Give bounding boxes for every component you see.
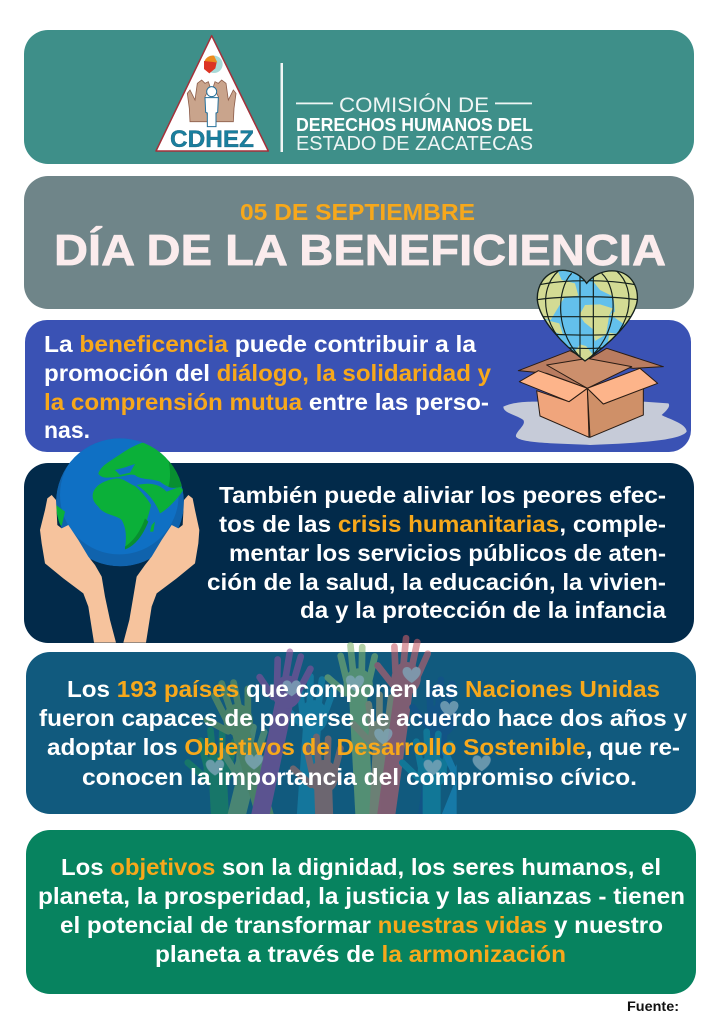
text block: objetivos <box>38 854 685 967</box>
palm hearts <box>206 667 491 776</box>
text block: dialogue: nas. <box>44 417 90 443</box>
text block: humanitarian crises: ción de la salud, la educación, la vivien- <box>207 569 666 595</box>
panel: title <box>24 176 694 309</box>
globe <box>56 436 184 566</box>
panel: objetivos <box>26 830 696 994</box>
text block: humanitarian crises: da y la protección de la infancia <box>300 597 666 623</box>
left hand <box>40 495 116 643</box>
text block: dialogue <box>44 331 491 443</box>
text block: Naciones Unidas <box>39 676 687 790</box>
right hand <box>123 495 199 643</box>
panel: humanitarian crises <box>24 463 694 643</box>
text block: humanitarian crises: mentar los servicios públicos de aten- <box>229 540 666 566</box>
text block: dialogue: promoción del diálogo, la solidaridad y <box>44 360 491 386</box>
divider line and organisation name <box>280 63 533 155</box>
text block: humanitarian crises <box>207 482 666 623</box>
text block: Naciones Unidas: fueron capaces de ponerse de acuerdo hace dos años y <box>39 705 687 731</box>
icon: CDHEZ triangle logo <box>156 36 268 153</box>
text block: humanitarian crises: tos de las crisis humanitarias , comple- <box>219 511 666 537</box>
divider line and organisation name: COMISIÓN DE <box>339 94 489 117</box>
divider line and organisation name: DERECHOS HUMANOS DEL <box>296 115 533 135</box>
text block: objetivos: planeta, la prosperidad, la justicia y las alianzas - tienen <box>38 883 685 909</box>
text block: Naciones Unidas: adoptar los Objetivos de Desarrollo Sostenible , que re- <box>47 734 680 760</box>
panel: benefit dialogue <box>25 320 691 452</box>
text block: objetivos: el potencial de transformar nuestras vidas y nuestro <box>60 912 663 938</box>
illustration: raised colourful hands <box>184 634 457 814</box>
text block: humanitarian crises: También puede aliviar los peores efec- <box>219 482 666 508</box>
panel: header with logo <box>24 30 694 164</box>
text block: Naciones Unidas: Los 193 países que componen las Naciones Unidas <box>67 676 660 702</box>
cardboard box <box>518 348 663 437</box>
date heading: 05 DE SEPTIEMBRE <box>240 199 475 225</box>
logo wordmark: CDHEZ: CDHEZ <box>170 126 254 153</box>
icon: hands holding the globe <box>40 436 199 643</box>
icon: heart-shaped globe in open box <box>503 265 687 445</box>
panel: Naciones Unidas <box>26 652 696 814</box>
text block: objetivos: Los objetivos son la dignidad, los seres humanos, el <box>61 854 661 880</box>
text block: objetivos: planeta a través de la armonización <box>155 941 566 967</box>
divider line and organisation name: ESTADO DE ZACATECAS <box>296 133 533 155</box>
text block: dialogue: la comprensión mutua entre las perso- <box>44 389 489 415</box>
source note: Fuente: <box>627 999 679 1014</box>
main title: DÍA DE LA BENEFICIENCIA <box>54 225 666 275</box>
floor shadow <box>503 402 687 445</box>
text block: Naciones Unidas: conocen la importancia del compromiso cívico. <box>82 764 637 790</box>
heart globe <box>536 270 638 362</box>
text block: dialogue: La beneficencia puede contribuir a la <box>44 331 476 357</box>
